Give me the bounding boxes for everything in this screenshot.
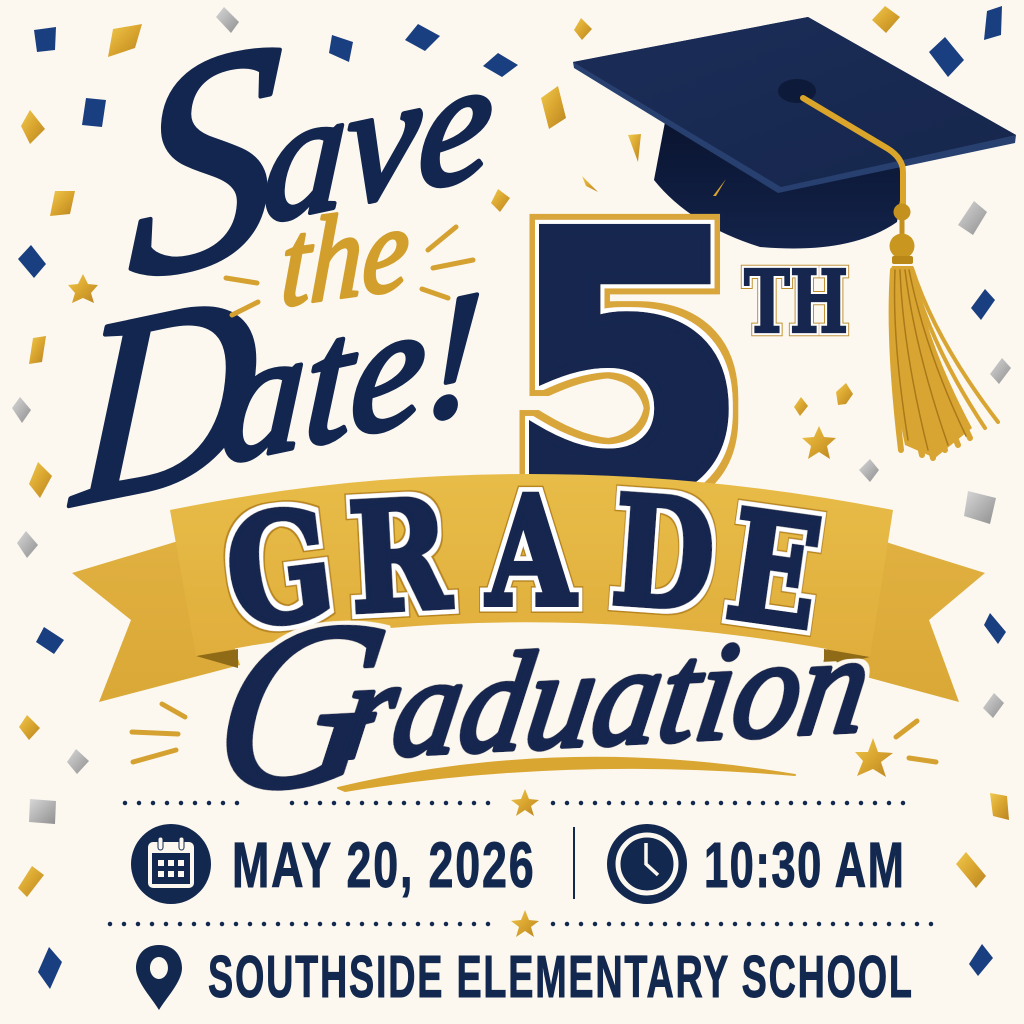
ribbon folds xyxy=(196,649,238,668)
script heading: Save xyxy=(123,0,502,348)
GRADE heading: E xyxy=(718,477,831,664)
script heading: the: the xyxy=(279,179,412,333)
GRADE heading xyxy=(217,462,831,664)
star confetti xyxy=(68,274,893,777)
script heading: Date! xyxy=(65,185,490,564)
cap base xyxy=(654,122,905,249)
tassel xyxy=(803,98,998,458)
dotted divider one xyxy=(125,789,912,816)
confetti on cap xyxy=(713,179,726,196)
gold underline swoosh xyxy=(338,758,795,791)
GRADE heading: D xyxy=(607,462,720,645)
numeral 5: 5 xyxy=(507,157,748,581)
sparkle accents xyxy=(132,227,936,762)
script heading: Graduation: G xyxy=(200,571,402,842)
calendar icon xyxy=(131,824,211,904)
right ribbon tail xyxy=(822,540,985,702)
script heading: Graduation xyxy=(200,545,890,842)
script heading: Save: ave xyxy=(260,20,498,260)
cap board xyxy=(573,17,1016,193)
divider star xyxy=(511,789,539,816)
cap button xyxy=(778,79,816,103)
script heading: Graduation: raduation xyxy=(332,605,881,789)
left ribbon tail xyxy=(72,540,240,702)
GRADE heading: R xyxy=(345,466,455,648)
superscript TH: TH xyxy=(744,252,848,353)
vertical separator xyxy=(573,827,575,899)
divider star xyxy=(511,910,539,937)
location pin icon xyxy=(136,945,182,1010)
ribbon banner xyxy=(72,474,985,702)
GRADE heading: A xyxy=(485,464,577,640)
clock icon xyxy=(607,824,687,904)
time: 10:30 AM xyxy=(704,829,904,901)
dotted divider two xyxy=(110,910,938,937)
date: MAY 20, 2026 xyxy=(232,829,534,901)
graduation cap xyxy=(573,17,1016,249)
script heading: Date!: D xyxy=(65,233,264,564)
ribbon centre xyxy=(170,474,893,657)
venue: SOUTHSIDE ELEMENTARY SCHOOL xyxy=(208,945,912,1010)
GRADE heading: G xyxy=(217,476,343,663)
script heading: Date!: ate! xyxy=(217,253,486,502)
